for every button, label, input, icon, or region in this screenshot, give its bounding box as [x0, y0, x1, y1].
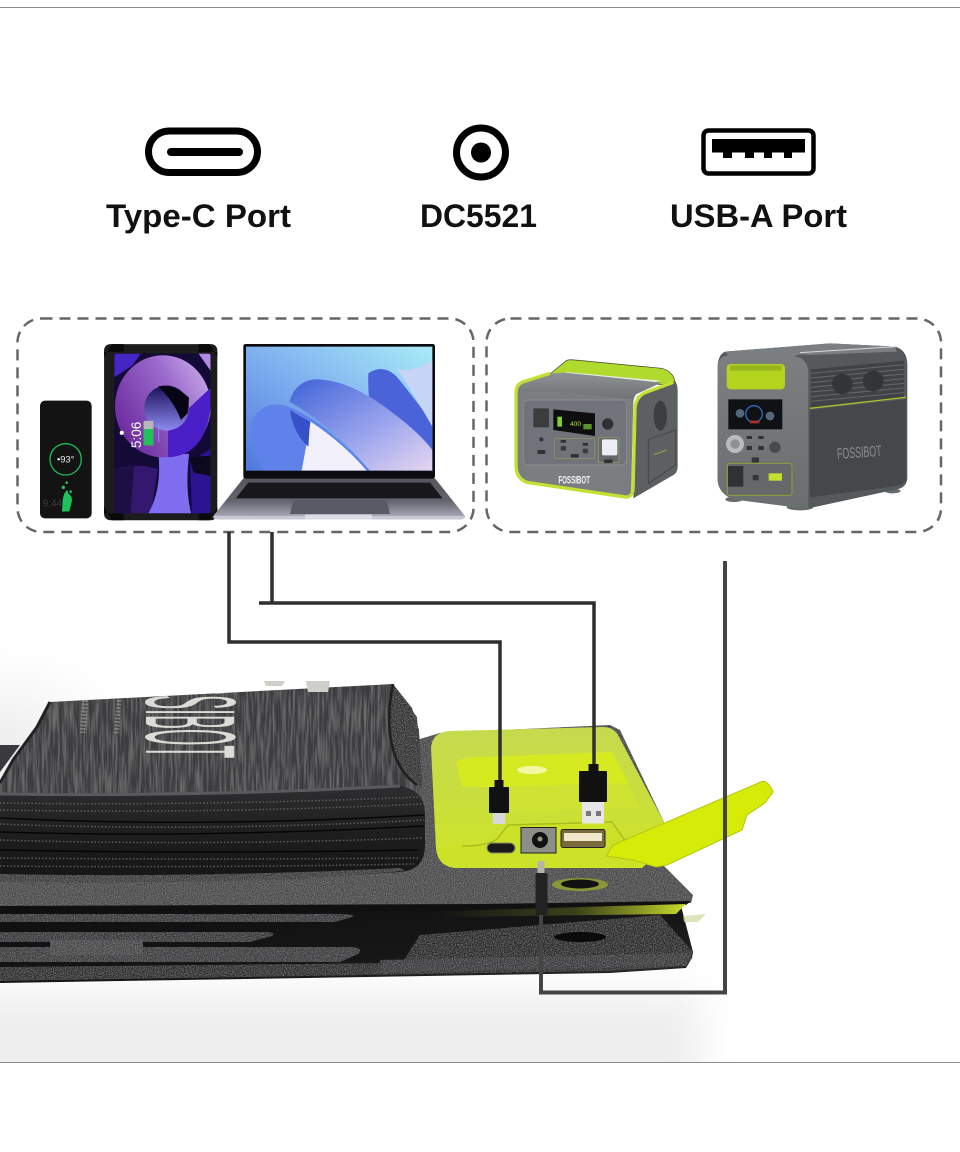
pouch logo text: FOSSIBOT	[118, 652, 260, 758]
plug: DC5521	[536, 861, 548, 915]
label: USB-A Port: USB-A Port	[670, 198, 847, 234]
lower folded panels	[0, 902, 706, 983]
plug: Type-C	[489, 780, 509, 824]
solar panel photo	[0, 652, 773, 983]
rear fold sliver	[0, 745, 20, 772]
line: Type-C device cable	[229, 532, 500, 785]
device: tablet: 5:06	[129, 422, 144, 448]
device: phone	[40, 401, 92, 518]
label: Type-C Port: Type-C Port	[106, 198, 291, 234]
plug: USB-A	[579, 764, 607, 824]
port: Type-C	[487, 843, 515, 853]
device: lime-trim power station: FOSSIBOT	[558, 474, 590, 486]
device: laptop	[213, 344, 465, 519]
line: DC power station cable	[541, 561, 725, 992]
icon: Type-C port	[148, 131, 258, 172]
icon: DC5521 port	[456, 128, 506, 177]
panel: USB and Type-C devices	[18, 318, 474, 532]
icon: USB-A port	[704, 130, 814, 174]
device: phone: •93°	[57, 455, 75, 465]
storage pouch	[0, 681, 425, 882]
port: DC5521	[521, 828, 556, 853]
device: large power station	[718, 343, 907, 510]
device: phone: 9:44	[43, 499, 63, 510]
port legend	[106, 128, 847, 234]
photo background shading	[0, 700, 700, 1112]
connection lines	[229, 532, 725, 992]
device: large power station: FOSSIBOT	[836, 443, 883, 463]
line: USB-A device cable	[259, 532, 594, 765]
device: lime-trim power station	[516, 360, 678, 498]
device: lime-trim power station: 400	[570, 421, 581, 428]
port: USB-A	[561, 830, 605, 848]
label: DC5521: DC5521	[420, 198, 537, 234]
top solar panel	[0, 725, 693, 917]
lime flap	[606, 781, 773, 867]
device: tablet	[104, 344, 217, 520]
lime junction box	[431, 727, 773, 868]
panel: power stations	[486, 318, 941, 532]
